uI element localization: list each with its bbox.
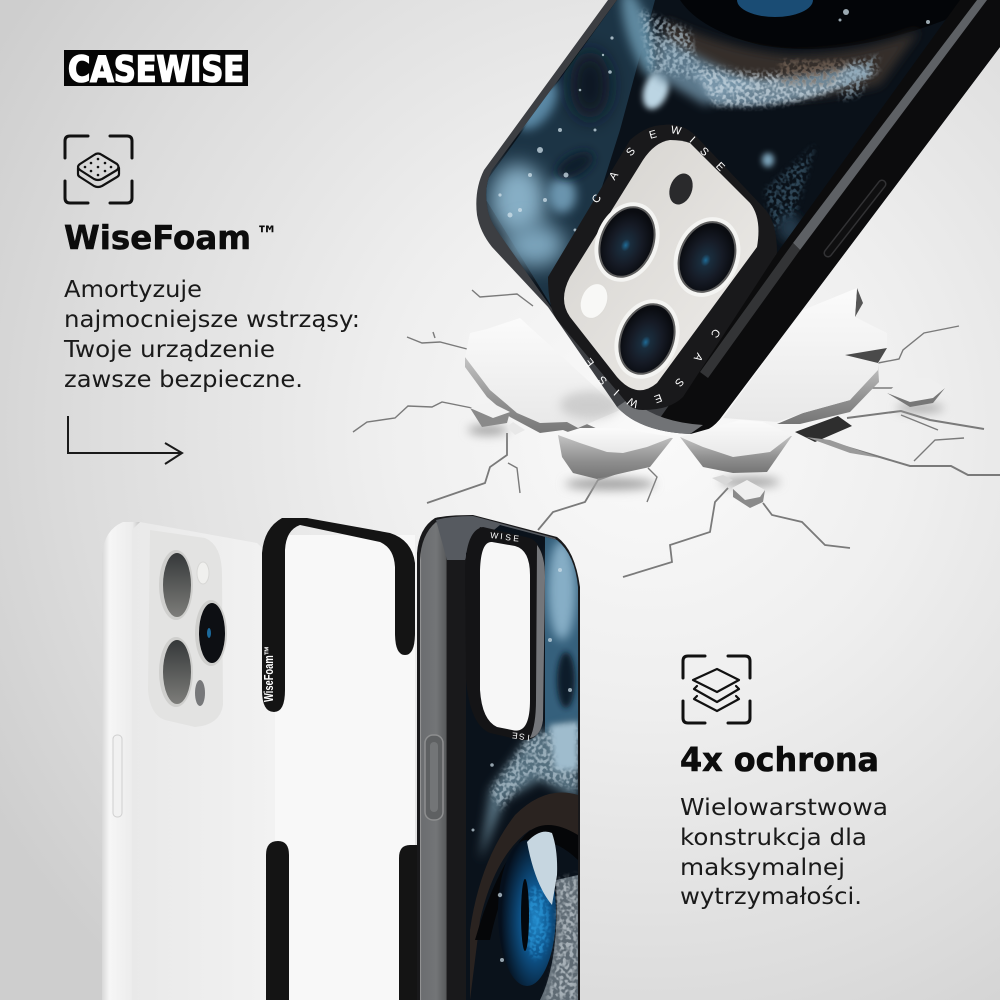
transparent film between foam <box>275 535 415 1000</box>
ring lettering: A <box>607 169 621 182</box>
ring lettering <box>490 530 530 743</box>
lens middle <box>195 600 227 666</box>
grey side band <box>420 522 447 1000</box>
black right rim <box>655 0 1000 434</box>
ring lettering: S <box>624 145 638 159</box>
text block: 4x ochrona description: konstrukcja dla <box>680 825 867 851</box>
sensor <box>195 680 205 706</box>
dark gap on right <box>795 416 852 442</box>
ring lettering: E <box>511 730 518 741</box>
top phone dropping into the wall <box>470 0 1000 434</box>
ring lettering: E <box>513 533 520 544</box>
foam strip left <box>266 841 289 1000</box>
text block: WiseFoam description: zawsze bezpieczne. <box>64 367 303 393</box>
ring lettering: S <box>518 731 525 742</box>
grey edge highlight <box>793 0 987 250</box>
ring opening <box>480 542 530 731</box>
soft shadows <box>468 404 944 490</box>
top edge shading <box>436 516 566 560</box>
front slabs and rubble <box>470 402 792 508</box>
frost lower right <box>540 875 578 1000</box>
ring lettering: E <box>648 128 658 142</box>
lens 2 <box>662 207 752 307</box>
slab lower right <box>680 420 792 473</box>
text block: 4x ochrona description: wytrzymałości. <box>680 884 862 910</box>
ring lettering: S <box>505 532 512 543</box>
side button <box>425 735 443 820</box>
ring lettering: C <box>590 192 604 206</box>
lens 3 <box>603 289 691 389</box>
cracked wall illustration <box>353 288 1000 577</box>
ring lettering: C <box>708 326 722 340</box>
text block: WiseFoam description <box>63 277 360 393</box>
arrow <box>68 416 182 464</box>
ring lettering <box>583 124 727 410</box>
ring lettering: E <box>652 391 664 405</box>
open case side view <box>417 515 580 1000</box>
case body <box>476 0 1000 434</box>
ring lettering: I <box>500 531 503 541</box>
ring lettering: I <box>527 733 530 743</box>
sclera <box>527 832 557 905</box>
side button <box>113 735 122 817</box>
heading: WiseFoam: WiseFoam <box>64 218 251 257</box>
lens 1 <box>583 192 671 292</box>
dragon eye <box>498 840 556 986</box>
icon: foam <box>65 136 132 203</box>
translucent bottom corner <box>617 398 703 434</box>
chip bottom <box>712 475 765 508</box>
camera ring <box>465 527 545 743</box>
ring lettering: W <box>670 124 683 138</box>
camera ring <box>548 124 777 410</box>
ring lettering: I <box>687 135 697 145</box>
lens bottom <box>159 637 193 707</box>
lid arc <box>470 792 578 1000</box>
dark lid and brown scales <box>680 0 965 49</box>
ring lettering: E <box>713 160 727 174</box>
foam strip right <box>399 845 420 1000</box>
ring lettering: W <box>625 394 640 410</box>
microphone hole <box>665 170 697 208</box>
side strip <box>102 522 140 1000</box>
icon: layers <box>683 656 750 723</box>
white iPhone back <box>102 522 275 1000</box>
text block: 4x ochrona description <box>680 795 888 910</box>
ring lettering: S <box>697 145 711 159</box>
case shell <box>417 515 580 1000</box>
heading: WiseFoam: ™ <box>256 221 278 249</box>
text block: WiseFoam description: Twoje urządzenie <box>63 337 275 363</box>
left slab <box>465 318 620 436</box>
chip left <box>470 402 525 435</box>
artwork <box>466 520 578 1000</box>
text block: 4x ochrona description: maksymalnej <box>680 855 845 881</box>
ring lettering: S <box>596 373 610 387</box>
ring lettering: I <box>612 387 622 397</box>
ring lettering: E <box>583 355 597 369</box>
frosted scales <box>480 720 578 860</box>
ring lettering: A <box>691 351 705 364</box>
flash <box>197 562 209 584</box>
chip right <box>887 378 945 407</box>
camera plateau <box>148 530 223 727</box>
lens top <box>159 550 193 620</box>
flash <box>575 279 613 323</box>
camera plate <box>564 140 758 390</box>
logo: CASEWISE <box>68 50 244 90</box>
foam label: WiseFoam™ <box>262 646 276 702</box>
WiseFoam black foam layer <box>262 518 420 1000</box>
slab lower left <box>558 428 673 479</box>
back artwork <box>486 0 960 308</box>
back panel <box>132 522 275 1000</box>
text block: 4x ochrona description: Wielowarstwowa <box>680 795 888 821</box>
right slab <box>723 288 887 424</box>
text block: WiseFoam description: najmocniejsze wstrząsy: <box>64 307 360 333</box>
ring lettering: W <box>490 530 499 541</box>
ring lettering: S <box>672 375 686 389</box>
side button <box>828 184 882 253</box>
text block: WiseFoam description: Amortyzuje <box>64 277 202 303</box>
heading: 4x ochrona: 4x ochrona <box>680 740 879 779</box>
